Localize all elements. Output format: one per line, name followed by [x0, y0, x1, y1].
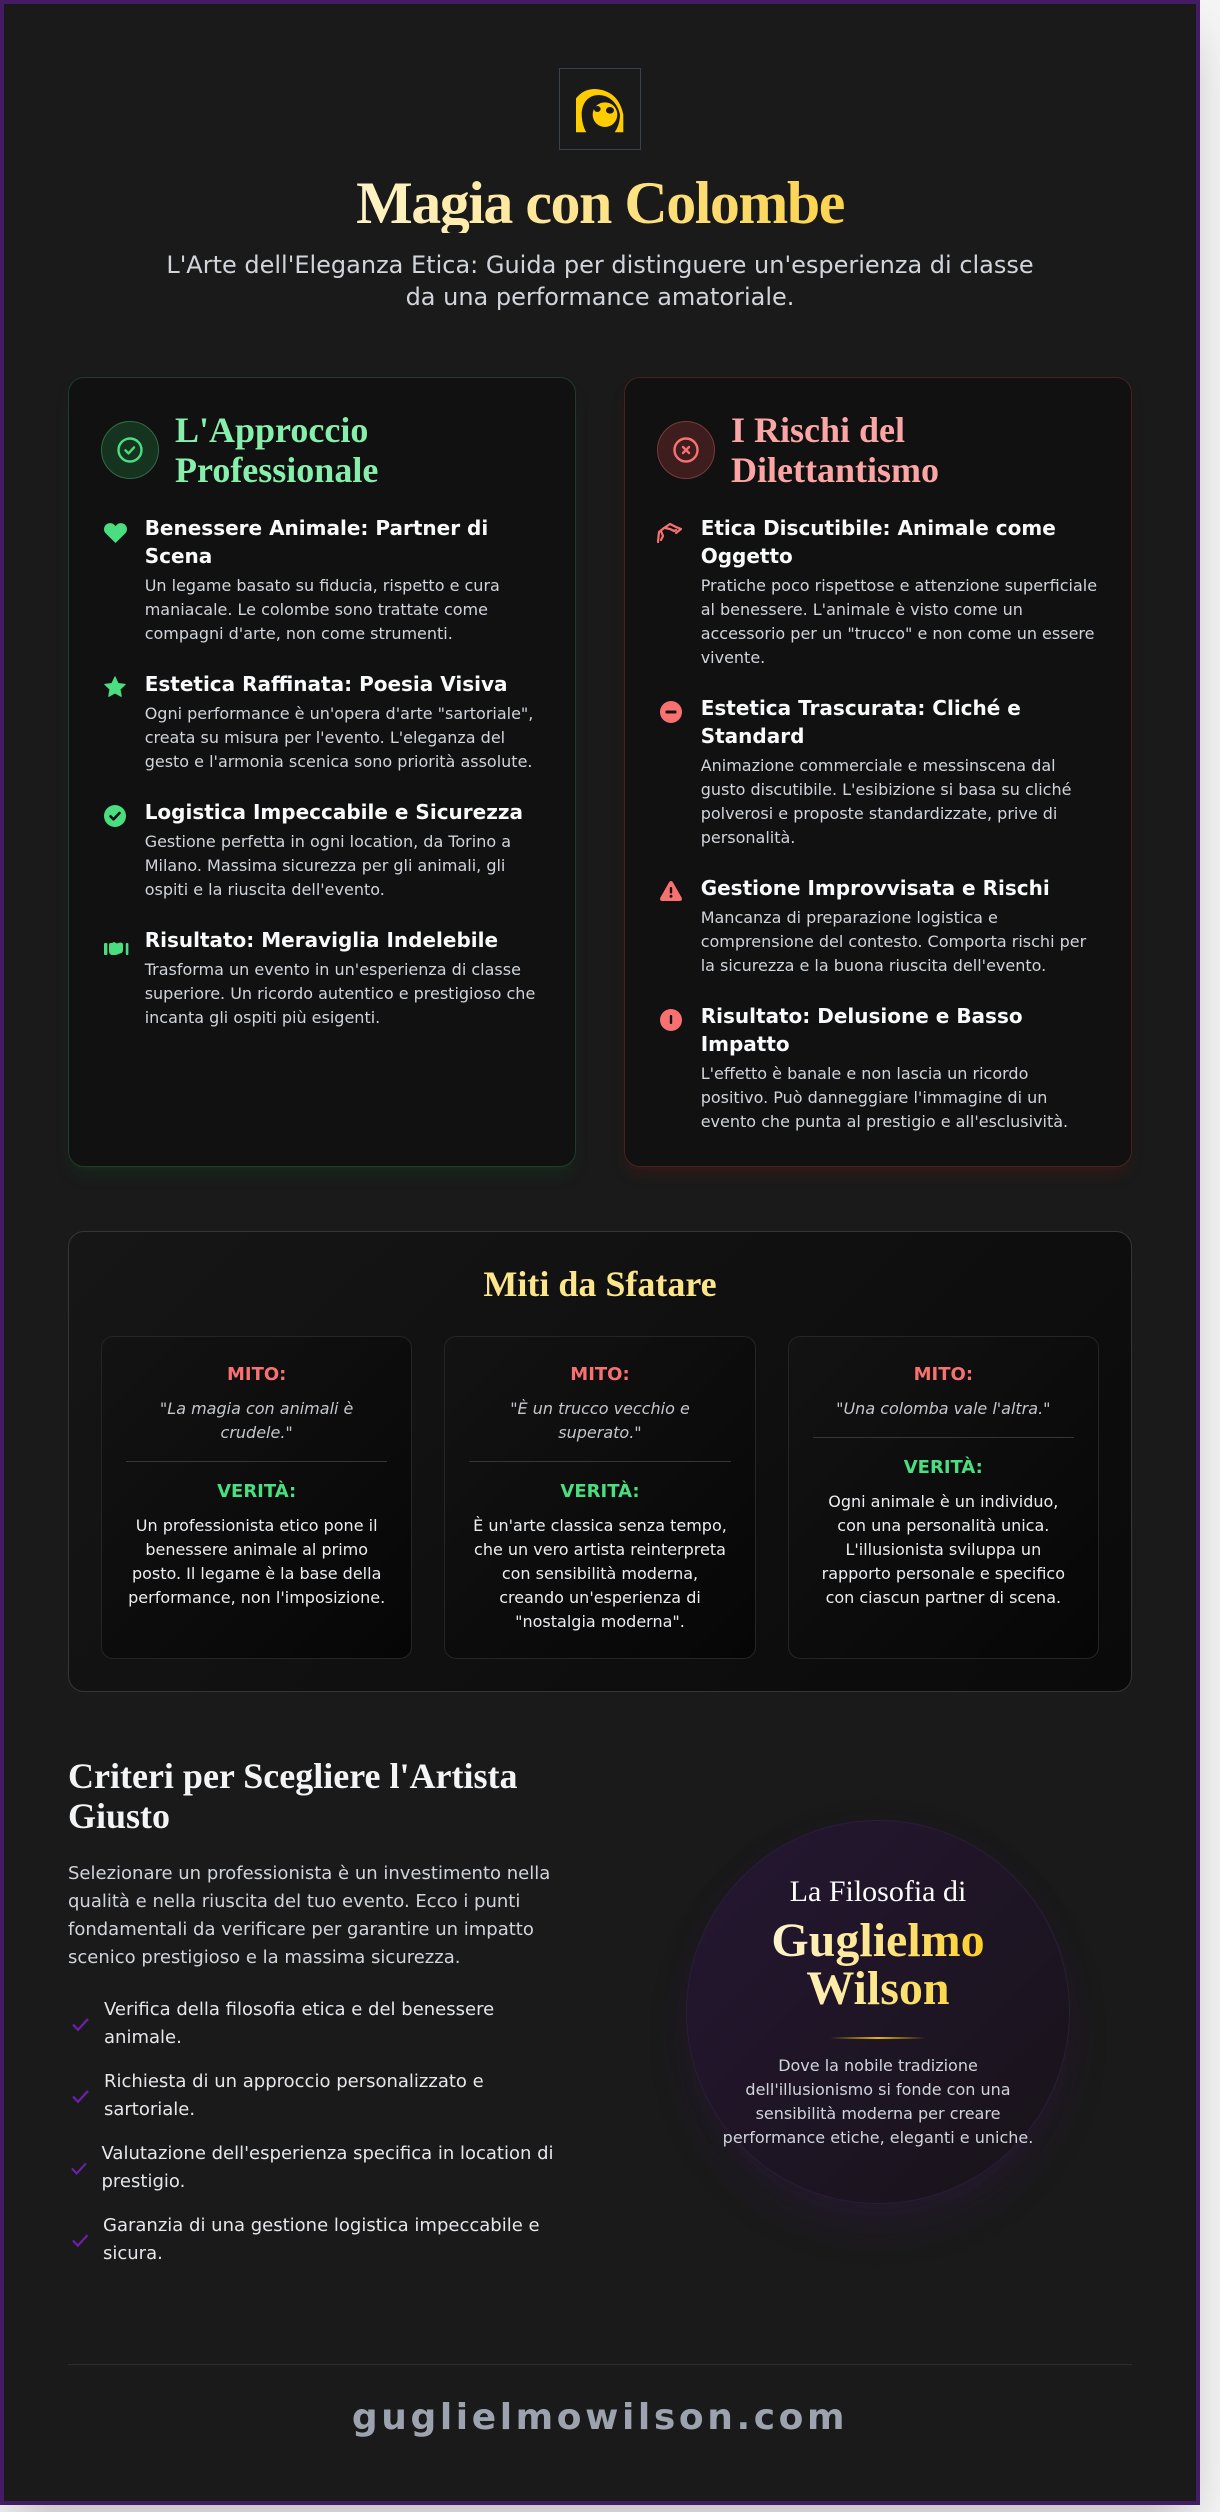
icon: check	[72, 2234, 88, 2248]
text: Verifica della filosofia etica e del benessere	[104, 1999, 494, 2020]
text: filosofia description: sensibilità moderna per creare	[756, 2104, 1000, 2123]
name: guglielmo wilson: Wilson	[806, 1962, 950, 2015]
quote: "La magia con animali è	[160, 1399, 353, 1418]
icon: check circle	[104, 805, 126, 827]
item: etica discutibile: accessorio per un "trucco" e non come un essere	[701, 624, 1094, 643]
label: mito: MITO:	[914, 1364, 973, 1385]
quote	[160, 1399, 353, 1442]
item: risultato meraviglia: Trasforma un evento in un'esperienza di classe	[145, 960, 521, 979]
text: filosofia description: dell'illusionismo si fonde con una	[745, 2080, 1011, 2099]
icon: check	[71, 2162, 87, 2175]
item: risultato meraviglia	[144, 928, 535, 1027]
item: risultato meraviglia: incanta gli ospiti più esigenti.	[145, 1008, 380, 1027]
item: logistica: Logistica Impeccabile e Sicurezza	[145, 800, 523, 824]
item: benessere animale: Un legame basato su fiducia, rispetto e cura	[145, 576, 500, 595]
item: etica discutibile: Oggetto	[701, 544, 793, 568]
item: logistica: Gestione perfetta in ogni location, da Torino a	[145, 832, 511, 851]
footer divider	[68, 2364, 1132, 2365]
body: Un professionista etico pone il	[136, 1516, 378, 1535]
text: criteri intro	[68, 1863, 550, 1968]
heading: approccio: L'Approccio	[175, 410, 368, 450]
name: guglielmo wilson	[687, 1916, 1069, 2014]
body	[822, 1492, 1065, 1607]
item: logistica: Milano. Massima sicurezza per gli animali, gli	[145, 856, 505, 875]
item: logistica: ospiti e la riuscita dell'evento.	[145, 880, 385, 899]
item: benessere animale: compagni d'arte, non come strumenti.	[145, 624, 453, 643]
text	[102, 2143, 554, 2192]
body	[473, 1516, 727, 1631]
item: benessere animale	[145, 516, 500, 643]
icon: warning triangle	[660, 881, 682, 901]
item: risultato delusione: Impatto	[701, 1032, 790, 1056]
divider	[469, 1461, 731, 1462]
text: animale.	[104, 2027, 182, 2048]
icon: handshake	[104, 942, 128, 955]
card: mito 1	[101, 1336, 412, 1659]
item: risultato meraviglia: superiore. Un ricordo autentico e prestigioso che	[145, 984, 535, 1003]
heading: miti: Miti da Sfatare	[483, 1264, 717, 1304]
item: gestione improvvisata: la sicurezza e la buona riuscita dell'evento.	[701, 956, 1046, 975]
body: "nostalgia moderna".	[515, 1612, 685, 1631]
text: la filosofia di: La Filosofia di	[790, 1875, 966, 1908]
panel: approccio professionale	[68, 377, 576, 1167]
item: risultato delusione	[701, 1004, 1068, 1131]
text: filosofia description: Dove la nobile tradizione	[778, 2056, 978, 2075]
item: estetica trascurata: polverosi e proposte standardizzate, prive di	[701, 804, 1057, 823]
body: benessere animale al primo	[145, 1540, 368, 1559]
text	[103, 2215, 540, 2264]
body: L'illusionista sviluppa un	[845, 1540, 1041, 1559]
heading: approccio	[175, 410, 378, 490]
icon: star	[104, 676, 126, 697]
body: con sensibilità moderna,	[502, 1564, 698, 1583]
text: criteri intro: scenico prestigioso e la massima sicurezza.	[68, 1947, 460, 1968]
text: prestigio.	[102, 2171, 185, 2192]
heading: criteri: Criteri per Scegliere l'Artista	[68, 1756, 518, 1796]
quote: "Una colomba vale l'altra."	[836, 1399, 1051, 1418]
text: Valutazione dell'esperienza specifica in location di	[102, 2143, 554, 2164]
quote	[510, 1399, 690, 1442]
item: benessere animale: maniacale. Le colombe sono trattate come	[145, 600, 488, 619]
heading: rischi: Dilettantismo	[731, 450, 939, 490]
body: con una personalità unica.	[837, 1516, 1049, 1535]
body: performance, non l'imposizione.	[128, 1588, 385, 1607]
panel: miti da sfatare	[68, 1231, 1132, 1692]
divider	[126, 1461, 387, 1462]
heading: criteri	[68, 1756, 518, 1836]
checklist item 4	[72, 2215, 540, 2264]
item: risultato delusione: positivo. Può danneggiare l'immagine di un	[701, 1088, 1047, 1107]
icon: broken dove	[656, 522, 682, 544]
text: sartoriale.	[104, 2099, 195, 2120]
icon: minus circle	[660, 701, 682, 723]
label: mito: MITO:	[227, 1364, 286, 1385]
item: risultato delusione: L'effetto è banale e non lascia un ricordo	[701, 1064, 1028, 1083]
label: verità: VERITÀ:	[217, 1481, 296, 1502]
card: mito 2	[444, 1336, 756, 1659]
item: estetica raffinata: creata su misura per l'evento. L'eleganza del	[145, 728, 505, 747]
icon: heart	[104, 523, 127, 543]
footer: website: guglielmowilson.com	[352, 2397, 848, 2438]
text: filosofia description: performance etiche, eleganti e uniche.	[723, 2128, 1033, 2147]
text: sicura.	[103, 2243, 163, 2264]
heading: approccio: Professionale	[175, 450, 378, 490]
body: È un'arte classica senza tempo,	[473, 1516, 727, 1535]
logo	[559, 68, 641, 150]
text	[104, 2071, 484, 2120]
icon: red cross badge	[657, 421, 715, 479]
checklist item 2	[72, 2071, 484, 2120]
item: benessere animale: Benessere Animale: Partner di	[145, 516, 488, 540]
item: etica discutibile	[701, 516, 1097, 667]
heading: rischi	[731, 410, 939, 490]
item: risultato delusione: Risultato: Delusione e Basso	[701, 1004, 1023, 1028]
icon: green check badge	[101, 421, 159, 479]
body: posto. Il legame è la base della	[132, 1564, 381, 1583]
item: estetica raffinata	[145, 672, 533, 771]
item: etica discutibile: vivente.	[701, 648, 765, 667]
body: rapporto personale e specifico	[822, 1564, 1065, 1583]
body: creando un'esperienza di	[499, 1588, 701, 1607]
quote: crudele."	[221, 1423, 293, 1442]
item: estetica trascurata: Animazione commerciale e messinscena dal	[701, 756, 1056, 775]
body: Ogni animale è un individuo,	[828, 1492, 1058, 1511]
item: gestione improvvisata: Gestione Improvvisata e Rischi	[701, 876, 1050, 900]
item: gestione improvvisata: Mancanza di preparazione logistica e	[701, 908, 998, 927]
text: Richiesta di un approccio personalizzato e	[104, 2071, 484, 2092]
subtitle: L'Arte dell'Eleganza Etica: Guida per distinguere un'esperienza di classe	[166, 251, 1034, 279]
text: criteri intro: Selezionare un professionista è un investimento nella	[68, 1863, 550, 1884]
body: con ciascun partner di scena.	[826, 1588, 1061, 1607]
item: etica discutibile: Etica Discutibile: Animale come	[701, 516, 1056, 540]
gold divider	[830, 2037, 926, 2039]
quote: superato."	[558, 1423, 642, 1442]
checklist item 1	[72, 1999, 494, 2048]
quote: "È un trucco vecchio e	[510, 1399, 690, 1418]
item: estetica trascurata: personalità.	[701, 828, 795, 847]
panel: filosofia circle	[686, 1820, 1070, 2204]
item: gestione improvvisata	[701, 876, 1086, 975]
subtitle	[166, 251, 1034, 311]
body	[128, 1516, 385, 1607]
item: estetica trascurata: Standard	[701, 724, 804, 748]
icon: dove magician emblem	[576, 89, 624, 132]
item: risultato meraviglia: Risultato: Meraviglia Indelebile	[145, 928, 498, 952]
item: estetica trascurata: Estetica Trascurata: Cliché e	[701, 696, 1021, 720]
heading: criteri: Giusto	[68, 1796, 170, 1836]
text: criteri intro: fondamentali da verificare per garantire un impatto	[68, 1919, 534, 1940]
item: estetica trascurata: gusto discutibile. L'esibizione si basa su cliché	[701, 780, 1071, 799]
text: filosofia description	[687, 2054, 1069, 2150]
icon: check	[72, 2090, 89, 2104]
item: estetica raffinata: Ogni performance è un'opera d'arte "sartoriale",	[145, 704, 533, 723]
text: Garanzia di una gestione logistica impeccabile e	[103, 2215, 540, 2236]
item: risultato delusione: evento che punta al prestigio e all'esclusività.	[701, 1112, 1068, 1131]
checklist item 3	[71, 2143, 554, 2192]
card: mito 3	[788, 1336, 1099, 1659]
item: estetica raffinata: gesto e l'armonia scenica sono priorità assolute.	[145, 752, 532, 771]
item: benessere animale: Scena	[145, 544, 212, 568]
item: estetica trascurata	[700, 696, 1071, 847]
heading: rischi: I Rischi del	[731, 410, 905, 450]
divider	[813, 1437, 1074, 1438]
name: guglielmo wilson: Guglielmo	[771, 1914, 985, 1966]
subtitle: da una performance amatoriale.	[406, 283, 794, 311]
label: mito: MITO:	[570, 1364, 630, 1385]
label: verità: VERITÀ:	[904, 1457, 983, 1478]
icon: check	[72, 2018, 89, 2032]
label: verità: VERITÀ:	[560, 1481, 640, 1502]
item: etica discutibile: al benessere. L'animale è visto come un	[701, 600, 1023, 619]
text: criteri intro: qualità e nella riuscita del tuo evento. Ecco i punti	[68, 1891, 520, 1912]
item: logistica	[145, 800, 523, 899]
title: Magia con Colombe	[356, 170, 844, 236]
panel: rischi del dilettantismo	[624, 377, 1132, 1167]
item: gestione improvvisata: comprensione del contesto. Comporta rischi per	[701, 932, 1086, 951]
icon: exclamation circle	[660, 1009, 682, 1031]
body: che un vero artista reinterpreta	[474, 1540, 726, 1559]
item: estetica raffinata: Estetica Raffinata: Poesia Visiva	[145, 672, 508, 696]
text	[104, 1999, 494, 2048]
item: etica discutibile: Pratiche poco rispettose e attenzione superficiale	[701, 576, 1097, 595]
